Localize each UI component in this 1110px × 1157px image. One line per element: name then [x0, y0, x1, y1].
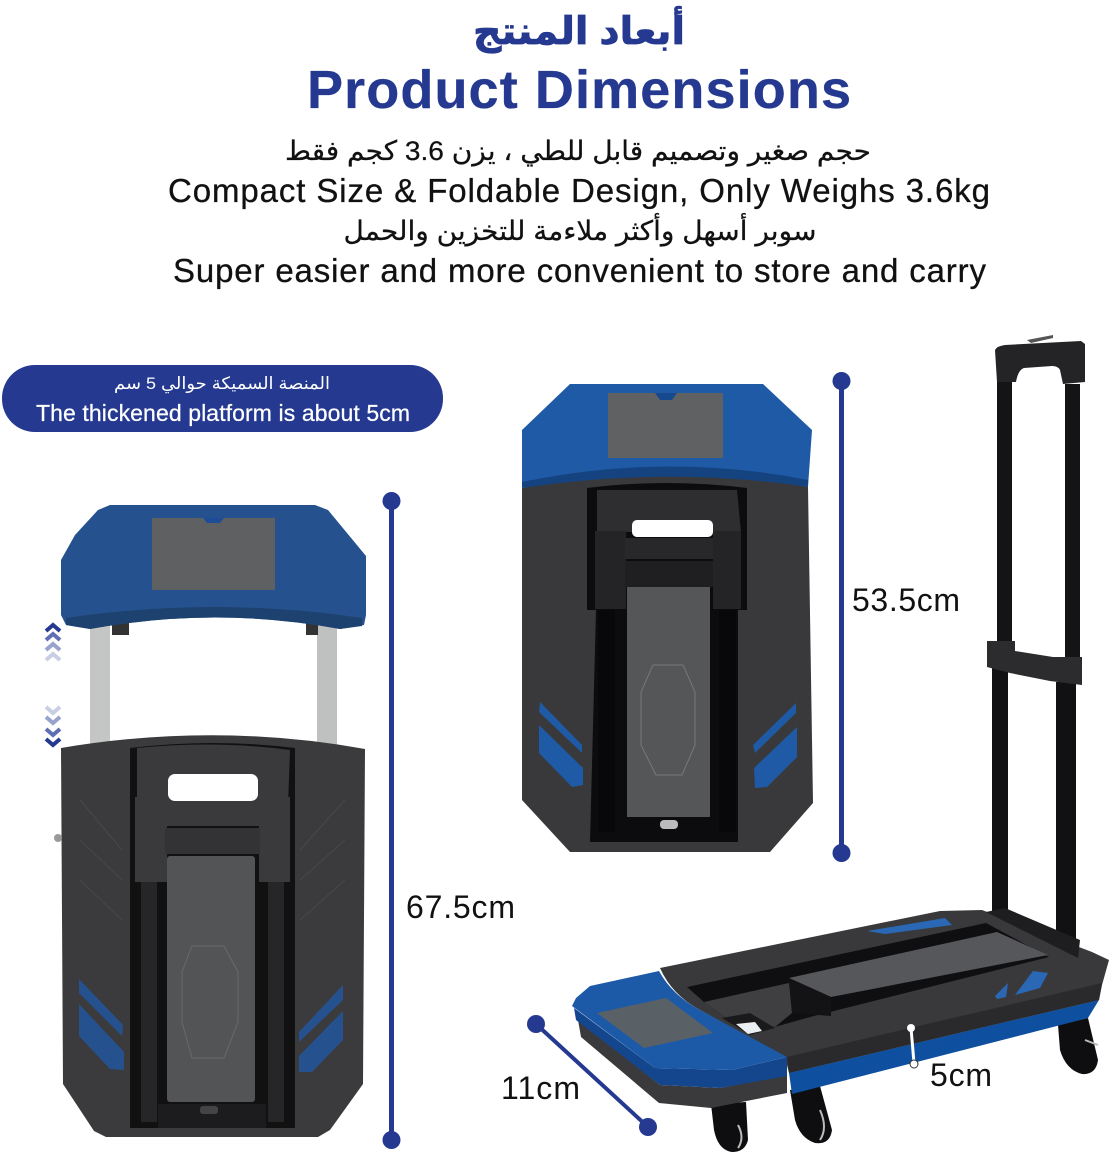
- black body: [522, 473, 813, 852]
- title: Arabic heading: أبعاد المنتج: [473, 6, 685, 53]
- blue end cap side: [574, 1008, 787, 1088]
- arrow: extend up: [46, 625, 60, 660]
- blue side band: [789, 1000, 1099, 1094]
- callout: thickened platform: The thickened platform is about 5cm: [36, 400, 410, 426]
- blue deck marks: [867, 918, 1048, 999]
- faint chevrons: [80, 800, 345, 920]
- blue stripes: [539, 702, 797, 788]
- metal legs: [90, 610, 110, 748]
- dimension line: 11cm: [527, 1015, 657, 1136]
- handle recess: [130, 743, 295, 1128]
- dimension marker: 5cm: [907, 1024, 918, 1068]
- subtitle: easier to store: Super easier and more convenient to store and carry: [173, 252, 986, 289]
- dimension line: 53.5cm: [832, 372, 850, 862]
- gray plate: [789, 932, 1048, 997]
- rails: [598, 610, 615, 832]
- rails: [141, 882, 157, 1122]
- storage panel: [152, 518, 275, 590]
- handle recess: [587, 483, 747, 842]
- black deck: [660, 910, 1109, 1073]
- title: Product Dimensions: Product Dimensions: [307, 60, 851, 120]
- label: 67.5cm: 67.5cm: [406, 889, 515, 925]
- gray plate: [627, 587, 710, 817]
- panel: open trolley: [572, 335, 1109, 1152]
- blue end cap: [61, 505, 366, 629]
- plate side: [789, 978, 831, 1016]
- blue end cap top: [572, 971, 787, 1070]
- handle hole: [722, 1013, 775, 1035]
- callout: thickened platform: المنصة السميكة حوالي 5 سم: [114, 374, 330, 394]
- dimension line: 67.5cm: [382, 492, 400, 1149]
- label: 11cm: 11cm: [501, 1070, 580, 1106]
- label: 53.5cm: 53.5cm: [852, 582, 960, 618]
- subtitle: Arabic compact size: حجم صغير وتصميم قابل للطي ، يزن 3.6 كجم فقط: [285, 136, 871, 167]
- platform end underside: [578, 1020, 787, 1108]
- storage panel: [608, 393, 723, 458]
- label: 5cm: 5cm: [930, 1057, 992, 1093]
- frame at handle base: [986, 908, 1080, 958]
- callout: thickened platform: [2, 365, 443, 432]
- panel: folded trolley: [522, 384, 813, 852]
- wheels: [711, 1018, 1098, 1152]
- gray plate: [167, 856, 255, 1102]
- side bolt: [54, 834, 62, 842]
- blue end cap: [522, 384, 812, 487]
- slot: [687, 923, 1049, 1028]
- subtitle: compact size: Compact Size & Foldable Design, Only Weighs 3.6kg: [168, 172, 990, 209]
- blue stripes: [79, 979, 343, 1072]
- telescopic handle: [987, 335, 1085, 940]
- arrow: retract down: [46, 707, 60, 745]
- black body: [61, 735, 365, 1137]
- panel: extended folded trolley: [54, 505, 366, 1137]
- subtitle: Arabic easier to store: سوبر أسهل وأكثر ملاءمة للتخزين والحمل: [344, 212, 816, 247]
- end cap storage panel: [597, 998, 713, 1048]
